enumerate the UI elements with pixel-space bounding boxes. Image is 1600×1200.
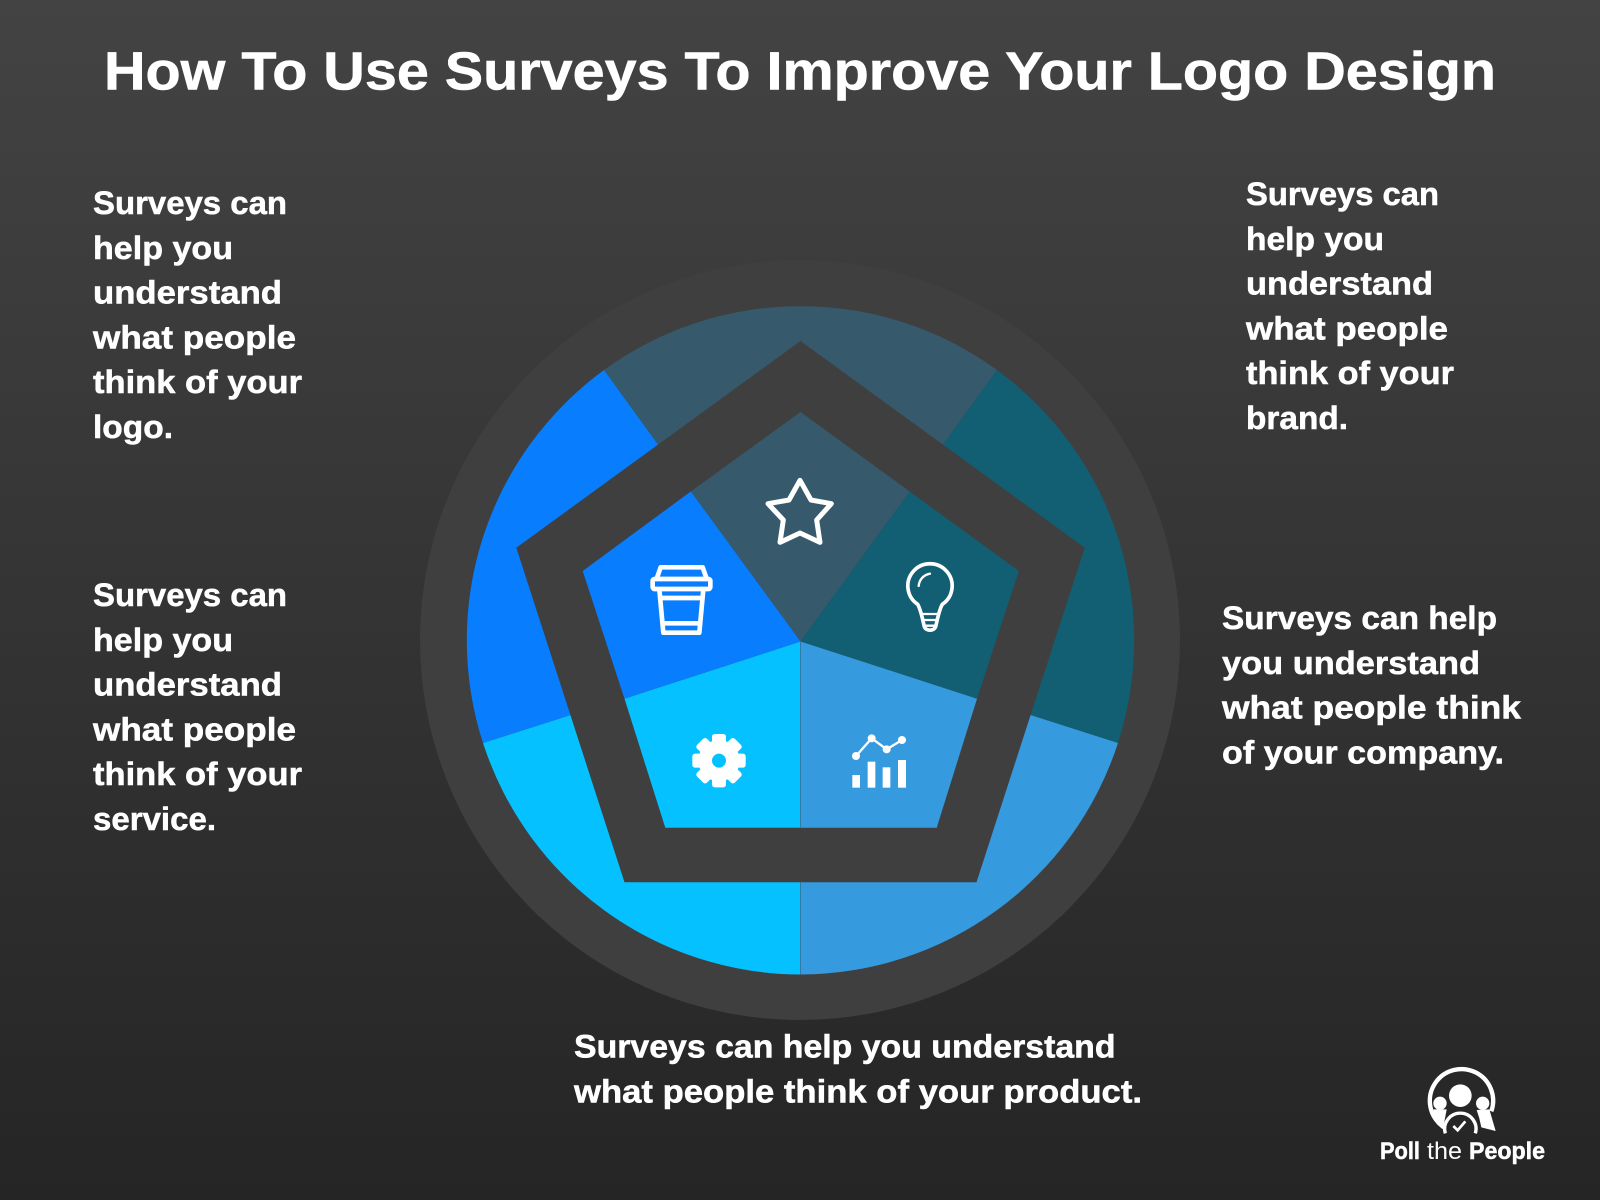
text block: service: what people [92, 711, 296, 747]
text block: company: of your company. [1222, 734, 1504, 770]
text block: brand: understand [1246, 266, 1433, 302]
pentagon band [516, 341, 1085, 882]
text block: product: what people think of your product. [573, 1074, 1142, 1110]
icon: chart [852, 734, 906, 788]
text block: brand: brand. [1246, 400, 1348, 436]
outer sector: bottom right [800, 642, 1118, 974]
logo wordmark [1380, 1138, 1545, 1165]
icon: coffee cup [653, 567, 710, 633]
text block: service: understand [93, 667, 282, 703]
seam [800, 880, 802, 974]
outer sector: top [604, 306, 997, 642]
inner sector: bottom right [800, 642, 977, 828]
text block: brand [1245, 176, 1454, 436]
inner sector: right [800, 492, 1019, 699]
logo wordmark: Poll [1380, 1138, 1420, 1165]
inner sector: left [583, 492, 800, 699]
text block: service [92, 577, 302, 837]
outer sector: left [467, 370, 800, 743]
text block: service: Surveys can [93, 577, 287, 613]
icon: gear [692, 734, 746, 787]
icon: star [768, 480, 831, 542]
text block: company: you understand [1222, 645, 1480, 681]
logo wordmark: the [1427, 1138, 1462, 1165]
text block: company: Surveys can help [1222, 600, 1497, 636]
text block: brand: Surveys can [1246, 176, 1439, 212]
outer ring [420, 260, 1180, 1020]
text block: logo: help you [93, 230, 233, 266]
text block: logo: understand [93, 275, 282, 311]
text block: service: think of your [93, 756, 302, 792]
outer sector: bottom left [483, 642, 800, 974]
text block: product: Surveys can help you understand [574, 1028, 1116, 1064]
text block: company: what people think [1221, 690, 1521, 726]
text block: logo: think of your [93, 364, 302, 400]
text block: logo: logo. [93, 409, 173, 445]
text block: service: help you [93, 622, 233, 658]
text block: brand: think of your [1246, 355, 1454, 391]
seam inner [800, 642, 802, 828]
text block: logo [92, 185, 302, 445]
pentagon diagram [420, 260, 1180, 1020]
text block: service: service. [93, 801, 216, 837]
inner sector: bottom left [624, 642, 800, 828]
text block: product [573, 1028, 1142, 1110]
title: How To Use Surveys To Improve Your Logo Design [104, 42, 1496, 102]
logo wordmark: People [1469, 1138, 1545, 1165]
inner sector: top [691, 412, 910, 642]
icon: light bulb [908, 564, 952, 630]
text block: company [1221, 600, 1521, 770]
text block: logo: what people [92, 319, 296, 355]
logo: Poll the People [1380, 1069, 1545, 1165]
logo mark [1430, 1069, 1496, 1133]
text block: brand: help you [1246, 221, 1384, 257]
outer sector: right [800, 370, 1134, 743]
text block: logo: Surveys can [93, 185, 287, 221]
text block: brand: what people [1245, 310, 1448, 346]
